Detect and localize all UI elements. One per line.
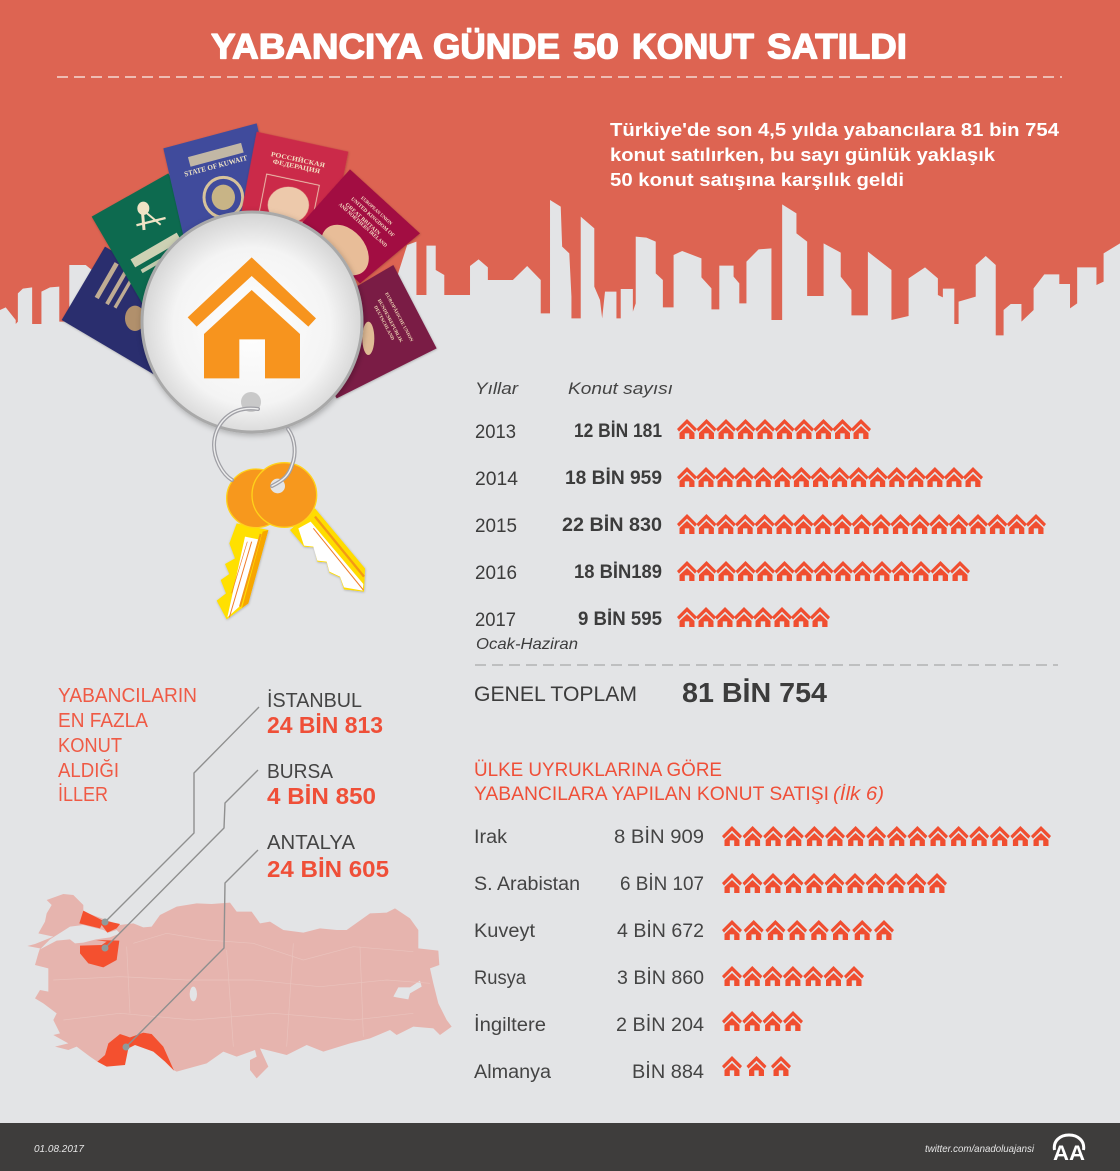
left heading: cities foreigners buy most: İLLER — [58, 783, 108, 806]
row: 2013 — [475, 419, 871, 443]
row: S. Arabistan: 6 BİN 107 — [620, 874, 704, 895]
leader lines — [102, 707, 259, 1050]
passport: saudi green — [92, 173, 227, 317]
country section heading: (İlk 6) — [833, 784, 884, 805]
key: right head — [252, 463, 317, 527]
passport: united kingdom burgundy: EUROPEAN UNION — [359, 196, 393, 227]
country rows — [474, 826, 1051, 1083]
red header with skyline silhouette — [0, 0, 1120, 335]
row: 2014 — [475, 467, 983, 490]
row: Kuveyt — [474, 920, 894, 942]
row: S. Arabistan — [474, 873, 947, 895]
passport: russia red: РОССИЙСКАЯ — [270, 150, 326, 169]
passport: germany maroon: EUROPÄISCHE UNION — [383, 291, 415, 343]
row: 2013: 12 BİN 181 — [574, 421, 662, 442]
row: Rusya: 3 BİN 860 — [617, 968, 704, 989]
row: Almanya: Almanya — [474, 1062, 551, 1083]
row: 2014: 18 BİN 959 — [565, 468, 662, 489]
leader: Istanbul — [102, 707, 259, 926]
row: 2017: Ocak-Haziran — [476, 636, 578, 653]
row: Irak: Irak — [474, 827, 508, 848]
title: KONUT — [632, 28, 754, 66]
key hole — [241, 392, 261, 412]
passports fan — [62, 123, 437, 398]
city: Istanbul — [267, 689, 383, 738]
key: left head — [227, 469, 285, 528]
grand total — [474, 677, 827, 708]
leader: Bursa — [102, 770, 258, 952]
country section heading — [474, 760, 884, 805]
passport: kuwait blue: STATE OF KUWAIT — [183, 153, 248, 179]
grand total: 81 BİN 754 — [682, 677, 827, 708]
row: 2017: 9 BİN 595 — [578, 609, 662, 630]
row: 2017: 2017 — [475, 610, 516, 631]
passport: united kingdom burgundy: UNITED KINGDOM OF — [349, 196, 395, 239]
country section heading: YABANCILARA YAPILAN KONUT SATIŞI — [474, 784, 829, 805]
city: Antalya: 24 BİN 605 — [267, 856, 389, 882]
row: 2017 — [475, 607, 830, 653]
row: 2015: 2015 — [475, 516, 517, 537]
map: Bursa province — [80, 940, 119, 967]
row: Almanya — [474, 1056, 791, 1083]
twitter handle: twitter.com/anadoluajansi — [925, 1143, 1035, 1155]
row: 2016: 18 BİN189 — [574, 562, 662, 583]
passport: navy — [62, 247, 213, 380]
city: Istanbul: İSTANBUL — [267, 689, 362, 712]
column headers: Yıllar — [475, 379, 519, 398]
map of Turkey — [27, 894, 452, 1078]
column headers: Konut sayısı — [568, 379, 673, 398]
icon: orange house — [188, 257, 316, 378]
map: Istanbul province — [79, 911, 120, 933]
left heading: cities foreigners buy most: KONUT — [58, 735, 122, 757]
row: Irak: 8 BİN 909 — [614, 827, 704, 848]
column headers — [475, 379, 673, 398]
intro text block: konut satılırken, bu sayı günlük yaklaşık — [610, 144, 996, 165]
passport: germany maroon: BUNDESREPUBLIK — [376, 299, 403, 344]
row: İngiltere: İngiltere — [474, 1015, 546, 1036]
left heading: cities foreigners buy most: ALDIĞI — [58, 759, 119, 782]
date: 01.08.2017 — [34, 1144, 84, 1155]
title: 50 — [573, 28, 619, 66]
left heading: cities foreigners buy most — [58, 685, 197, 806]
row: 2014: 2014 — [475, 469, 518, 490]
map: Antalya province — [97, 1033, 174, 1071]
city: Bursa — [267, 760, 376, 809]
yearly sales rows — [475, 419, 1046, 653]
map: sea of Marmara — [40, 925, 120, 949]
left heading: cities foreigners buy most: YABANCILARIN — [58, 685, 197, 707]
passport: united kingdom burgundy: AND NORTHERN IRELAND — [337, 202, 388, 249]
intro text block: 50 konut satışına karşılık geldi — [610, 169, 904, 190]
title: YABANCIYA — [211, 28, 423, 66]
city: Istanbul: 24 BİN 813 — [267, 712, 383, 738]
passport: russia red: ФЕДЕРАЦИЯ — [272, 158, 321, 175]
row: Rusya: Rusya — [474, 968, 526, 989]
key: left blade — [217, 523, 268, 619]
row: Kuveyt: Kuveyt — [474, 921, 536, 942]
passport: germany maroon — [293, 265, 437, 398]
intro text block — [610, 119, 1060, 190]
leader: Antalya — [122, 850, 258, 1050]
row: Rusya — [474, 966, 864, 989]
row: 2016: 2016 — [475, 563, 517, 584]
city: Antalya — [267, 831, 389, 882]
title — [211, 28, 907, 66]
glass disc with house icon — [142, 212, 362, 432]
row: İngiltere: 2 BİN 204 — [616, 1015, 704, 1036]
left heading: cities foreigners buy most: EN FAZLA — [58, 710, 149, 732]
passport: united kingdom burgundy: GREAT BRITAIN — [344, 202, 381, 237]
city: Bursa: 4 BİN 850 — [267, 783, 376, 809]
row: Almanya: BİN 884 — [632, 1062, 704, 1083]
key: right blade — [290, 508, 365, 592]
row: 2015: 22 BİN 830 — [562, 515, 662, 536]
row: 2015 — [475, 514, 1046, 537]
title: GÜNDE — [433, 28, 560, 66]
passport: united kingdom burgundy — [302, 169, 420, 285]
grand total: GENEL TOPLAM — [474, 683, 637, 706]
row: 2013: 2013 — [475, 422, 516, 443]
keys and ring — [217, 463, 365, 619]
city labels — [267, 689, 389, 882]
footer bar — [0, 1123, 1120, 1171]
map: country outline — [27, 894, 452, 1078]
key ring — [214, 408, 295, 486]
passport: russia red — [237, 132, 348, 260]
title: SATILDI — [767, 28, 907, 66]
city: Antalya: ANTALYA — [267, 831, 355, 854]
logo: AA: AA — [1053, 1142, 1085, 1165]
map: lakes — [190, 981, 422, 1001]
city: Bursa: BURSA — [267, 760, 333, 783]
passport: kuwait blue — [163, 123, 280, 250]
row: S. Arabistan: S. Arabistan — [474, 874, 580, 895]
intro text block: Türkiye'de son 4,5 yılda yabancılara 81 bin 754 — [610, 119, 1060, 140]
country section heading: ÜLKE UYRUKLARINA GÖRE — [474, 760, 722, 781]
row: İngiltere — [474, 1011, 803, 1036]
row: Kuveyt: 4 BİN 672 — [617, 921, 704, 942]
row: 2016 — [475, 561, 970, 584]
passport: germany maroon: DEUTSCHLAND — [372, 305, 395, 342]
row: Irak — [474, 826, 1051, 848]
